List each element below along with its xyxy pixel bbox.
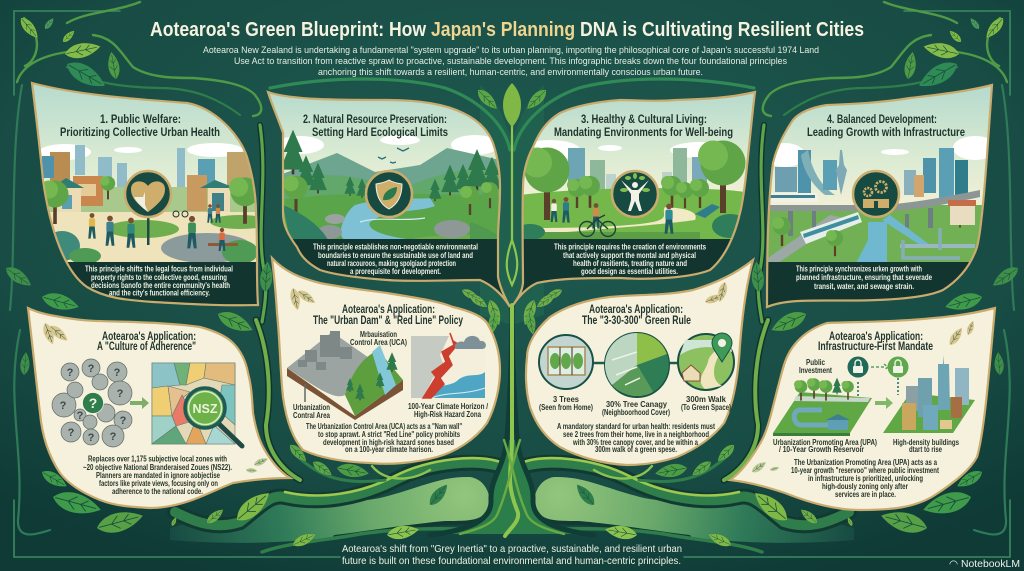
intro paragraph: Aotearoa New Zealand is undertaking a fundamental "system upgrade" to its urban planning, importing the philosophical core of Japan's successful 1974 Land xyxy=(203,45,819,55)
card 1 description xyxy=(83,454,232,496)
panel 3 description: that actively support the montal and physical xyxy=(563,251,696,260)
panel 1 description xyxy=(85,264,233,298)
question marks: ? xyxy=(68,427,75,439)
panel 3 description: good design as essential utilities. xyxy=(581,267,678,276)
card 4 heading: Infrastructure-First Mandate xyxy=(818,341,933,353)
card 1 description: Replaces over 1,175 subjective local zones with xyxy=(88,454,227,464)
buildings label: dtart to rise xyxy=(909,445,943,454)
card 4 description: services are in place. xyxy=(835,490,896,499)
panel 4 description: transit, water, and sewage strain. xyxy=(814,282,914,291)
card 2 description: to stop aprawt. A strict "Red Line" policy prohibits xyxy=(318,430,461,439)
panel 1 description: and the city's functional efficiency. xyxy=(109,288,210,298)
card 3 heading: Aotearoa's Application: xyxy=(589,304,683,316)
icon: canopy pie xyxy=(605,333,669,397)
panel 2 description: boundaries to ensure the sustainable use of land and xyxy=(318,251,473,260)
panel 1 heading: Prioritizing Collective Urban Health xyxy=(60,127,220,139)
public investment label: Public xyxy=(806,358,826,367)
panel 2 heading: Setting Hard Ecological Limits xyxy=(312,127,448,139)
intro paragraph: anchoring this shift towards a resilient, human-centric, and environmentally conscious urban future. xyxy=(318,67,703,77)
icon: lock two xyxy=(888,356,908,378)
card 3 description: A mandatory standard for urban health: residents must xyxy=(557,422,715,431)
red line map xyxy=(411,333,485,398)
public investment label xyxy=(799,358,832,375)
question marks: ? xyxy=(110,431,117,443)
panel: 1 public welfare xyxy=(30,80,270,312)
stem xyxy=(507,125,517,285)
pin xyxy=(712,333,732,362)
panel 2 base xyxy=(268,92,510,307)
connector xyxy=(590,362,680,364)
panel 4 base xyxy=(767,85,992,307)
buildings label xyxy=(893,438,960,454)
icon: 300m walk xyxy=(678,333,734,390)
card 2 description: development in high-risk hazard sones based xyxy=(323,438,454,447)
panel 1 description: property rights to the collective good, ensuring xyxy=(91,273,227,282)
card 3 description: with 30% tree canopy cover, and be within a xyxy=(572,438,699,447)
card 1 heading: Aotearoa's Application: xyxy=(102,331,196,343)
icon: shield badge xyxy=(366,171,412,217)
icon: lock one xyxy=(848,356,868,378)
NotebookLM mark: ◠ NotebookLM xyxy=(949,559,1020,570)
panel 3 heading: Mandating Environments for Well-being xyxy=(554,127,733,139)
ground vine xyxy=(262,529,490,552)
question marks xyxy=(60,363,127,444)
panel 3 description: This principle requires the creation of environments xyxy=(554,242,707,252)
walk stat labels: (To Green Space) xyxy=(681,403,731,412)
panel 3 description xyxy=(554,242,707,276)
sprig xyxy=(289,287,317,311)
question marks: ? xyxy=(88,363,95,375)
card 3 shape xyxy=(526,260,753,465)
walk stat labels: 300m Walk xyxy=(686,395,727,404)
panel 2 description xyxy=(313,242,478,276)
panel 1 heading: 1. Public Welfare: xyxy=(100,114,181,126)
magnifier: NSZ xyxy=(192,402,218,416)
arrow xyxy=(875,397,893,409)
panel 1 border xyxy=(32,83,258,305)
dashed arrow xyxy=(871,364,888,370)
icon: person badge xyxy=(612,171,658,217)
question marks: ? xyxy=(77,410,84,422)
card 2 heading: Aotearoa's Application: xyxy=(342,304,435,316)
card 2 shape xyxy=(272,258,500,464)
application card: infrastructure-first mandate xyxy=(730,308,995,510)
footer statement xyxy=(342,544,682,567)
panel 1 description: This principle shifts the legal focus from individual xyxy=(85,264,233,274)
card 2 description: The Urbanization Control Area (UCA) acts as a "Nam wall" xyxy=(306,422,462,431)
UCA label xyxy=(350,330,407,347)
card 3 description: see 2 trees from their home, live in a neighborhood xyxy=(563,430,709,439)
right label: High-Risk Hazard Zona xyxy=(414,410,482,419)
panel 4 scene xyxy=(768,86,991,262)
center channel xyxy=(480,85,544,325)
leaves xyxy=(3,15,504,549)
card 1 description: factors like private views, focusing only on xyxy=(99,479,218,488)
card 4 heading: Aotearoa's Application: xyxy=(829,331,923,343)
panel 1 base xyxy=(32,83,258,305)
channel vine between lower panels xyxy=(256,320,300,480)
card 1 shape xyxy=(28,308,290,508)
UPA label: / 10-Year Growth Reservoir xyxy=(779,445,864,454)
panel 4 description: planned infrastructure, ensuring that severade xyxy=(796,273,933,282)
card 4 description: 10-year growth "reservoo" where public investment xyxy=(791,466,939,475)
botanical decoration left half xyxy=(3,2,510,557)
public investment label: Investment xyxy=(799,366,832,375)
canopy stat labels: (Neighboorhood Cover) xyxy=(602,408,670,417)
question marks: ? xyxy=(114,367,121,379)
panel 3 heading xyxy=(554,114,733,139)
sprig bottom xyxy=(246,456,269,473)
panel 3 scene xyxy=(524,94,754,239)
walk stat labels xyxy=(681,395,731,412)
canopy stat labels: 30% Tree Canagy xyxy=(606,400,668,409)
question marks: ? xyxy=(120,415,127,427)
tree stat labels: 3 Trees xyxy=(553,395,580,404)
UPA label xyxy=(773,438,877,454)
sprig top xyxy=(41,321,70,346)
central question badge: ? xyxy=(89,395,97,411)
panel 2 scene xyxy=(270,94,499,239)
right label: 100-Year Climate Horizon / xyxy=(408,402,489,411)
sprig xyxy=(704,281,729,306)
botanical decoration right half xyxy=(514,2,1021,557)
birds xyxy=(378,148,409,163)
card 4 description: high-dously zoning only after xyxy=(822,482,908,491)
curl under card xyxy=(372,466,430,479)
panel 2 description: This principle establishes non-negotiable environmental xyxy=(313,242,478,252)
panel 3 description: health of rasitients, treating nature and xyxy=(573,259,687,268)
sprig top xyxy=(947,320,976,347)
card 1 description: adherence to the national code. xyxy=(112,487,203,496)
footer statement: future is built on these foundational environmental and human-centric principles. xyxy=(342,556,681,567)
card 1 heading xyxy=(97,331,196,353)
arc above panel xyxy=(270,79,510,150)
isometric dam block xyxy=(287,331,403,420)
question marks: ? xyxy=(60,400,67,412)
big branch to trunk xyxy=(175,463,505,525)
card 4 description: The Urbanization Promoting Area (UPA) acts as a xyxy=(794,458,938,467)
card 1 description: ~20 objective National Branderaised Zoues (NS22). xyxy=(83,463,232,472)
card 2 heading xyxy=(313,304,463,327)
panel: 4 balanced development xyxy=(765,85,997,312)
panel 4 heading: 4. Balanced Development: xyxy=(827,114,937,126)
field lower boundary xyxy=(335,508,490,537)
city buildings xyxy=(883,355,975,433)
card 3 description xyxy=(557,422,715,454)
footer statement: Aotearoa's shift from "Grey Inertia" to a proactive, sustainable, and resilient urban xyxy=(342,544,682,555)
question marks: ? xyxy=(67,367,74,379)
card 4 heading xyxy=(818,331,933,353)
panel 2 heading xyxy=(303,114,448,139)
panel 4 description xyxy=(796,264,933,291)
question marks: ? xyxy=(117,388,124,400)
icon: cloud xyxy=(455,336,486,349)
card 1 heading: A "Culture of Adherence" xyxy=(97,341,196,353)
panel 1 heading xyxy=(60,114,220,139)
frame xyxy=(14,11,340,557)
card 2 description: on a 100-year climate harison. xyxy=(345,445,433,454)
icon: 3 trees window xyxy=(539,335,593,389)
card 2 description xyxy=(306,422,462,454)
card 2 heading: The "Urban Dam" & "Red Line" Policy xyxy=(313,315,463,327)
panel 2 heading: 2. Natural Resource Preservation: xyxy=(303,114,447,126)
left label: Urbanization xyxy=(293,403,330,412)
panel 2 description: natural racouroos, making spolgiaod protection xyxy=(327,259,456,268)
panel 4 border xyxy=(767,85,992,307)
intro paragraph: Use Act to transition from reactive sprawl to proactive, sustainable development. This infographic breaks down the four foundational principles xyxy=(234,56,787,66)
application card: culture of adherence xyxy=(28,308,290,508)
icon: heart badge xyxy=(125,171,171,217)
UPA label: Urbanization Promoting Area (UPA) xyxy=(773,438,877,447)
card 3 heading: The "3-30-300" Green Rule xyxy=(582,315,691,327)
left label xyxy=(293,403,331,420)
panel: 2 natural resource preservation xyxy=(265,90,512,312)
canopy stat labels xyxy=(602,400,670,417)
application card: urban dam and red line xyxy=(272,258,500,464)
national zones map xyxy=(152,363,242,446)
right label xyxy=(408,402,489,419)
card 4 description: in infrastructure is prioritized, unlocking xyxy=(808,474,923,483)
panel 2 border xyxy=(268,92,510,307)
tree trunk and roots xyxy=(430,83,594,536)
arrow xyxy=(130,397,149,409)
application card: 3-30-300 rule xyxy=(526,260,753,465)
card 4 shape xyxy=(730,308,995,510)
panel 4 description: This principle synchronizes urken growth with xyxy=(796,264,922,274)
corner vines xyxy=(17,2,261,116)
tree stat labels xyxy=(539,395,593,412)
card 3 description: 300m walk of a green spese. xyxy=(595,445,677,454)
icon: gears badge xyxy=(853,171,899,217)
channel vine between upper panels xyxy=(260,125,266,322)
sprig bottom xyxy=(750,459,780,475)
intro paragraph xyxy=(203,45,819,77)
card 4 description xyxy=(791,458,939,499)
panel 1 scene xyxy=(33,84,256,262)
panel 1 description: decisions banofo the entire community's health xyxy=(91,281,230,290)
panel: 3 healthy and cultural living xyxy=(510,90,760,312)
panel 3 border xyxy=(513,92,755,305)
tree stat labels: (Seen from Home) xyxy=(539,403,593,412)
UCA label: Control Area (UCA) xyxy=(350,338,407,347)
left label: Contral Area xyxy=(293,411,331,420)
top center leaf xyxy=(503,83,521,127)
buildings label: High-density buildings xyxy=(893,438,960,447)
panel 3 base xyxy=(513,92,755,305)
card 1 description: Planners are mandated in ignore aobjectise xyxy=(96,471,220,480)
light field beside trunk xyxy=(170,477,490,543)
subjective zones diagram xyxy=(52,359,132,447)
UCA label: Mrbauisation xyxy=(360,330,397,339)
pin line xyxy=(304,384,306,402)
panel 3 heading: 3. Healthy & Cultural Living: xyxy=(581,114,707,126)
card 3 heading xyxy=(582,304,691,327)
title: Aotearoa's Green Blueprint: How Japan's Planning DNA is Cultivating Resilient Cities xyxy=(150,19,864,41)
panel 4 heading xyxy=(807,114,965,139)
question marks: ? xyxy=(88,432,95,444)
panel 2 description: a prorequisite for development. xyxy=(350,267,441,276)
infrastructure base xyxy=(773,378,872,436)
panel 4 heading: Leading Growth with Infrastructure xyxy=(807,127,965,139)
